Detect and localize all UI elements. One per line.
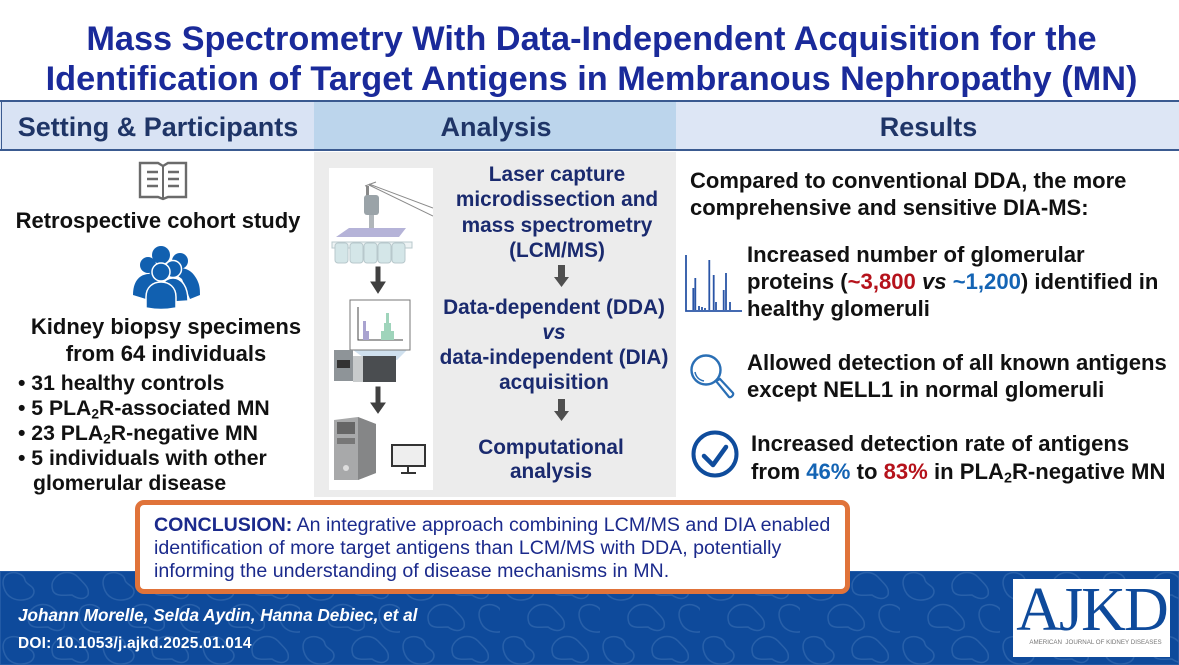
callout: conclusion: [135, 500, 850, 594]
arrow: [371, 387, 385, 413]
text: kidney biopsy specimens: Kidney biopsy specimens: [31, 314, 301, 339]
text: kidney biopsy specimens: [31, 314, 301, 366]
logo: AJKD: AMERICAN JOURNAL OF KIDNEY DISEASES: [1029, 639, 1162, 646]
mass spectrum: [350, 300, 410, 360]
text: result 3: from 46% to 83% in PLA2R-negative MN: [751, 458, 1165, 486]
microscope lens: [336, 182, 433, 237]
text: DDA vs DIA: acquisition: [499, 371, 609, 394]
callout: conclusion: informing the understanding of disease mechanisms in MN.: [154, 560, 669, 582]
panel: setting and participants: [16, 162, 301, 495]
text: result 1: healthy glomeruli: [747, 296, 930, 321]
text: result 1: Increased number of glomerular: [747, 242, 1085, 267]
text: computational analysis: [478, 436, 624, 483]
heading: analysis: [314, 102, 678, 149]
title: Mass Spectrometry With Data-Independent Acquisition for the: [86, 20, 1097, 58]
text: computational analysis: Computational: [478, 436, 624, 459]
arrow: [554, 265, 569, 287]
text: DDA vs DIA: vs: [542, 321, 566, 344]
panel: analysis: [314, 152, 676, 497]
text: DDA vs DIA: Data-dependent (DDA): [443, 296, 665, 319]
text: LCM/MS: (LCM/MS): [509, 239, 605, 262]
text: retrospective cohort study: Retrospective cohort study: [16, 208, 300, 233]
title: Identification of Target Antigens in Membranous Nephropathy (MN): [46, 60, 1137, 98]
panel: results: [685, 168, 1167, 486]
mass spectrometer: [334, 350, 396, 382]
text: DOI: DOI: 10.1053/j.ajkd.2025.01.014: [18, 635, 252, 652]
text: result 3: Increased detection rate of antigens: [751, 431, 1129, 456]
heading: setting and participants: [0, 102, 316, 149]
footer band: [0, 571, 1179, 665]
list: participant groups: • 31 healthy controls: [18, 372, 224, 395]
icon: group of people: [133, 246, 200, 309]
text: result 1: proteins (~3,800 vs ~1,200) identified in: [747, 269, 1158, 294]
icon: check mark circle: [692, 430, 738, 478]
list: participant groups: glomerular disease: [33, 472, 226, 495]
background pattern: [0, 571, 1179, 665]
text: LCM/MS: mass spectrometry: [462, 214, 652, 237]
text: authors: Johann Morelle, Selda Aydin, Hanna Debiec, et al: [18, 605, 417, 625]
computer: [334, 417, 425, 480]
icon: open book: [138, 162, 188, 200]
list: participant groups: [18, 372, 270, 495]
text: result 2: Allowed detection of all known antigens: [747, 350, 1167, 375]
heading: results: [676, 102, 1179, 149]
text: LCM/MS: microdissection and: [456, 188, 658, 211]
icon: magnifying glass: [690, 354, 734, 398]
text: DDA vs DIA: [440, 296, 668, 394]
arrow: [554, 399, 569, 421]
text: result 3: [751, 431, 1165, 486]
text: DDA vs DIA: data-independent (DIA): [440, 346, 668, 369]
icon: spectrum peaks: [685, 255, 742, 312]
illustration: workflow: [329, 168, 433, 490]
heading: setting and participants: Setting & Participants: [18, 112, 298, 142]
callout: conclusion: CONCLUSION: An integrative approach combining LCM/MS and DIA enabled: [154, 514, 830, 536]
header band: [0, 100, 1179, 151]
text: kidney biopsy specimens: from 64 individuals: [66, 341, 266, 366]
text: results intro: [690, 168, 1126, 220]
list: participant groups: • 23 PLA2R-negative MN: [18, 422, 258, 446]
list: participant groups: • 5 PLA2R-associated MN: [18, 397, 270, 421]
text: result 2: except NELL1 in normal glomeruli: [747, 377, 1104, 402]
text: computational analysis: analysis: [510, 460, 592, 483]
text: result 2: [747, 350, 1167, 402]
text: LCM/MS: [456, 163, 658, 262]
arrow: [371, 267, 385, 293]
text: result 1: [747, 242, 1158, 321]
list: participant groups: • 5 individuals with other: [18, 447, 267, 470]
heading: results: Results: [880, 112, 977, 142]
text: results intro: comprehensive and sensitive DIA-MS:: [690, 195, 1089, 220]
callout: conclusion: identification of more target antigens than LCM/MS with DDA, potentially: [154, 537, 781, 559]
heading: analysis: Analysis: [440, 112, 552, 142]
text: results intro: Compared to conventional DDA, the more: [690, 168, 1126, 193]
text: LCM/MS: Laser capture: [489, 163, 625, 186]
wells: [332, 242, 412, 263]
title: [46, 20, 1137, 98]
